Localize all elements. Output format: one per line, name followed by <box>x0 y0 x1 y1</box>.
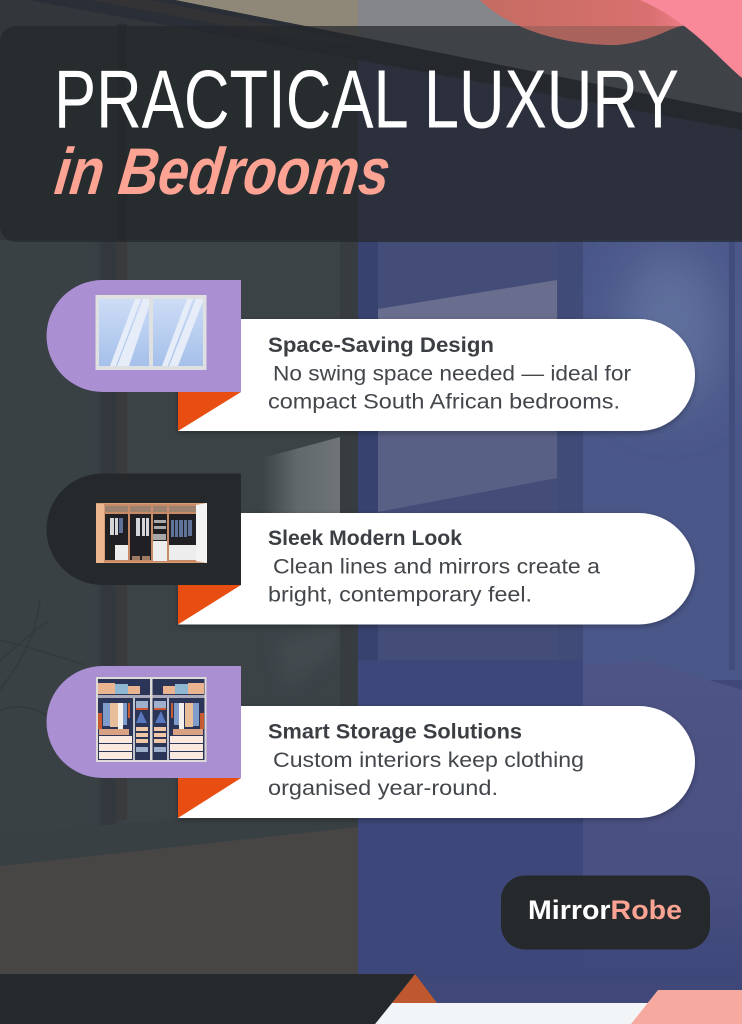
background: top wall and sloped wardrobe header <box>0 0 742 240</box>
decoration: pink blob top right <box>480 0 742 78</box>
footer salmon shape <box>631 990 742 1024</box>
logo badge <box>501 876 710 950</box>
card 3 orange fold <box>178 778 241 818</box>
card 2: sleek modern look <box>47 474 695 624</box>
card 1 orange fold <box>178 392 241 431</box>
card 1 text: No swing space needed — ideal for <box>273 362 631 386</box>
icon: organised wardrobe <box>96 677 206 762</box>
card 2 dark tab <box>47 474 241 585</box>
footer white band <box>375 1003 648 1024</box>
header panel <box>0 26 742 242</box>
icon: open wardrobe <box>96 503 207 563</box>
logo text: MirrorRobe <box>528 895 682 925</box>
card 1 heading: Space-Saving Design <box>268 334 494 357</box>
footer orange triangle <box>392 974 437 1003</box>
card 2 text: Clean lines and mirrors create a <box>273 556 600 578</box>
footer geometric shapes <box>0 974 742 1024</box>
card 3 text: Custom interiors keep clothing <box>273 749 584 772</box>
card 1 white body <box>178 319 695 431</box>
card 2 orange fold <box>178 585 241 624</box>
card 1 text <box>268 362 631 414</box>
subtitle: in Bedrooms <box>51 135 394 209</box>
card 3: smart storage solutions <box>47 666 695 818</box>
card 1: space-saving design <box>47 280 695 431</box>
card 3 text <box>268 749 584 800</box>
background: bedroom photo with colour overlays <box>0 240 742 1024</box>
card 3 purple tab <box>47 666 241 778</box>
card 1 text: compact South African bedrooms. <box>268 390 620 414</box>
card 2 white body <box>178 513 695 624</box>
icon: sliding window <box>96 295 206 370</box>
footer dark band <box>0 974 415 1024</box>
card 3 text: organised year-round. <box>268 777 498 800</box>
card 3 heading: Smart Storage Solutions <box>268 720 522 744</box>
card 1 purple tab <box>47 280 241 392</box>
card 2 heading: Sleek Modern Look <box>268 527 462 550</box>
card 3 white body <box>178 706 695 818</box>
card 2 text <box>268 556 600 606</box>
card 2 text: bright, contemporary feel. <box>268 584 532 606</box>
